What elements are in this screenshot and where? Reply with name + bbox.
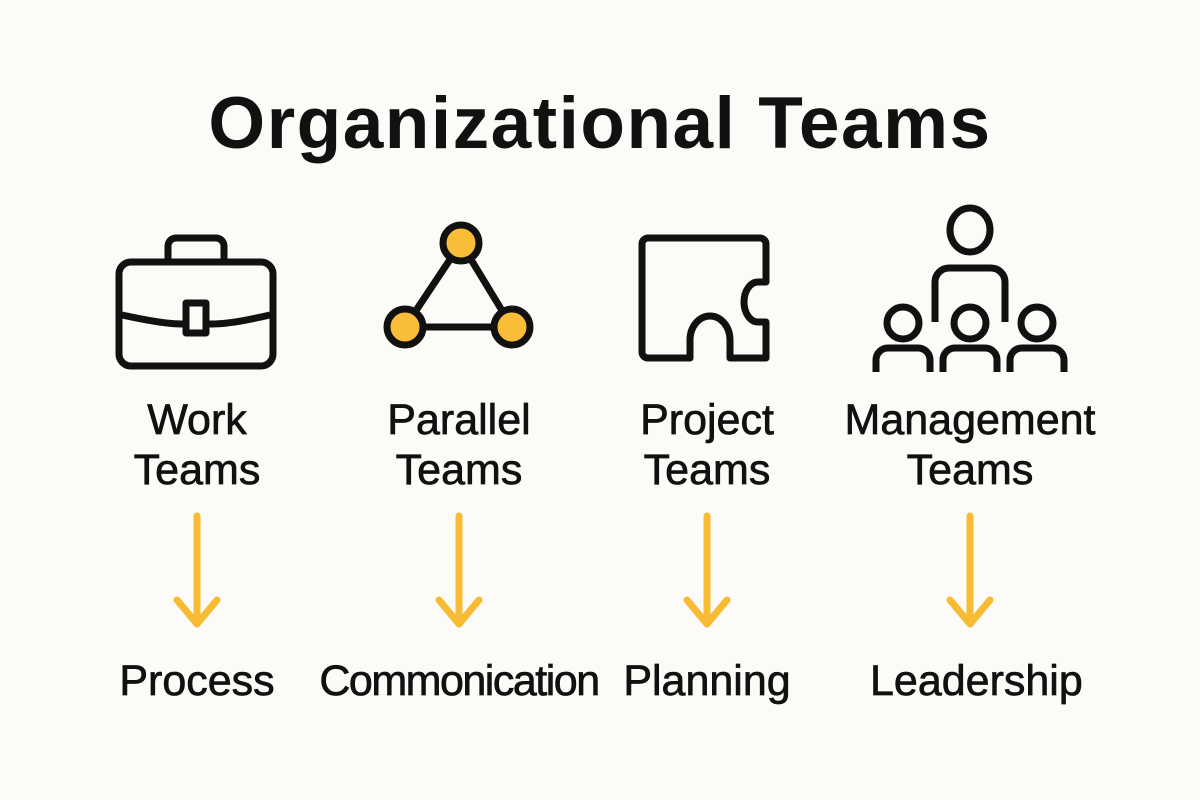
label: project teams bbox=[640, 396, 774, 494]
label: project teams: Teams bbox=[644, 446, 770, 494]
label: work teams: Work bbox=[147, 396, 247, 444]
arrows bbox=[177, 516, 990, 624]
outcome: leadership: Leadership bbox=[870, 657, 1083, 705]
label: management teams: Teams bbox=[907, 446, 1033, 494]
icon: briefcase bbox=[119, 238, 273, 366]
title: Organizational Teams bbox=[208, 83, 992, 164]
label: management teams: Management bbox=[844, 396, 1096, 444]
label: work teams bbox=[134, 396, 260, 494]
icon: triangle network bbox=[387, 225, 530, 345]
icon: puzzle piece bbox=[642, 238, 766, 358]
label: work teams: Teams bbox=[134, 446, 260, 494]
outcome: process: Process bbox=[119, 657, 275, 705]
icon: management people bbox=[876, 208, 1064, 372]
label: parallel teams: Teams bbox=[396, 446, 522, 494]
label: management teams bbox=[844, 396, 1096, 494]
outcome: communication: Commonication bbox=[319, 657, 599, 705]
outcome: planning: Planning bbox=[623, 657, 791, 705]
label: parallel teams: Parallel bbox=[387, 396, 531, 444]
label: parallel teams bbox=[387, 396, 531, 494]
label: project teams: Project bbox=[640, 396, 774, 444]
